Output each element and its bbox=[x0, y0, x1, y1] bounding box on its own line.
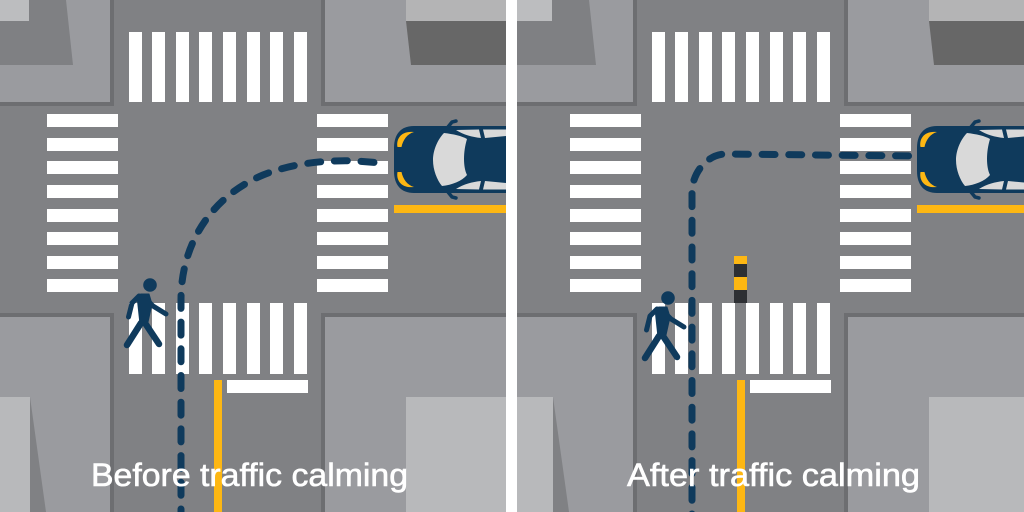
crosswalk: top bbox=[652, 32, 830, 102]
crosswalk: right bbox=[840, 114, 911, 292]
sidewalk: bottom left bbox=[0, 313, 114, 512]
sidewalk: top left bbox=[517, 0, 637, 106]
icon: car bbox=[917, 121, 1024, 198]
crosswalk: bottom bbox=[129, 303, 307, 374]
stop line bbox=[750, 380, 831, 393]
divider bbox=[506, 0, 517, 512]
sidewalk: top right bbox=[321, 0, 506, 106]
crosswalk: left bbox=[570, 114, 641, 292]
icon: pedestrian bbox=[645, 291, 684, 358]
caption: before: Before traffic calming bbox=[91, 457, 408, 493]
sidewalk: bottom right bbox=[321, 313, 506, 512]
vehicle path: wide fast turn bbox=[181, 161, 381, 512]
crosswalk: left bbox=[47, 114, 118, 292]
yellow centre line: south bbox=[737, 380, 745, 512]
yellow centre line: south bbox=[214, 380, 222, 512]
bollard: centre hardening post bbox=[734, 256, 747, 303]
yellow centre line: east bbox=[917, 205, 1024, 213]
sidewalk: top left bbox=[0, 0, 114, 106]
crosswalk: top bbox=[129, 32, 307, 102]
sidewalk: bottom right bbox=[844, 313, 1024, 512]
icon: pedestrian bbox=[127, 278, 166, 345]
sidewalk: bottom left bbox=[517, 313, 637, 512]
yellow centre line: east bbox=[394, 205, 506, 213]
crosswalk: right bbox=[317, 114, 388, 292]
stop line bbox=[227, 380, 308, 393]
crosswalk: bottom bbox=[652, 303, 830, 374]
icon: car bbox=[394, 121, 506, 198]
caption: after: After traffic calming bbox=[627, 457, 920, 493]
panel: after traffic calming bbox=[517, 0, 1024, 512]
panel: before traffic calming bbox=[0, 0, 506, 512]
sidewalk: top right bbox=[844, 0, 1024, 106]
vehicle path: tight slow turn bbox=[692, 154, 916, 512]
